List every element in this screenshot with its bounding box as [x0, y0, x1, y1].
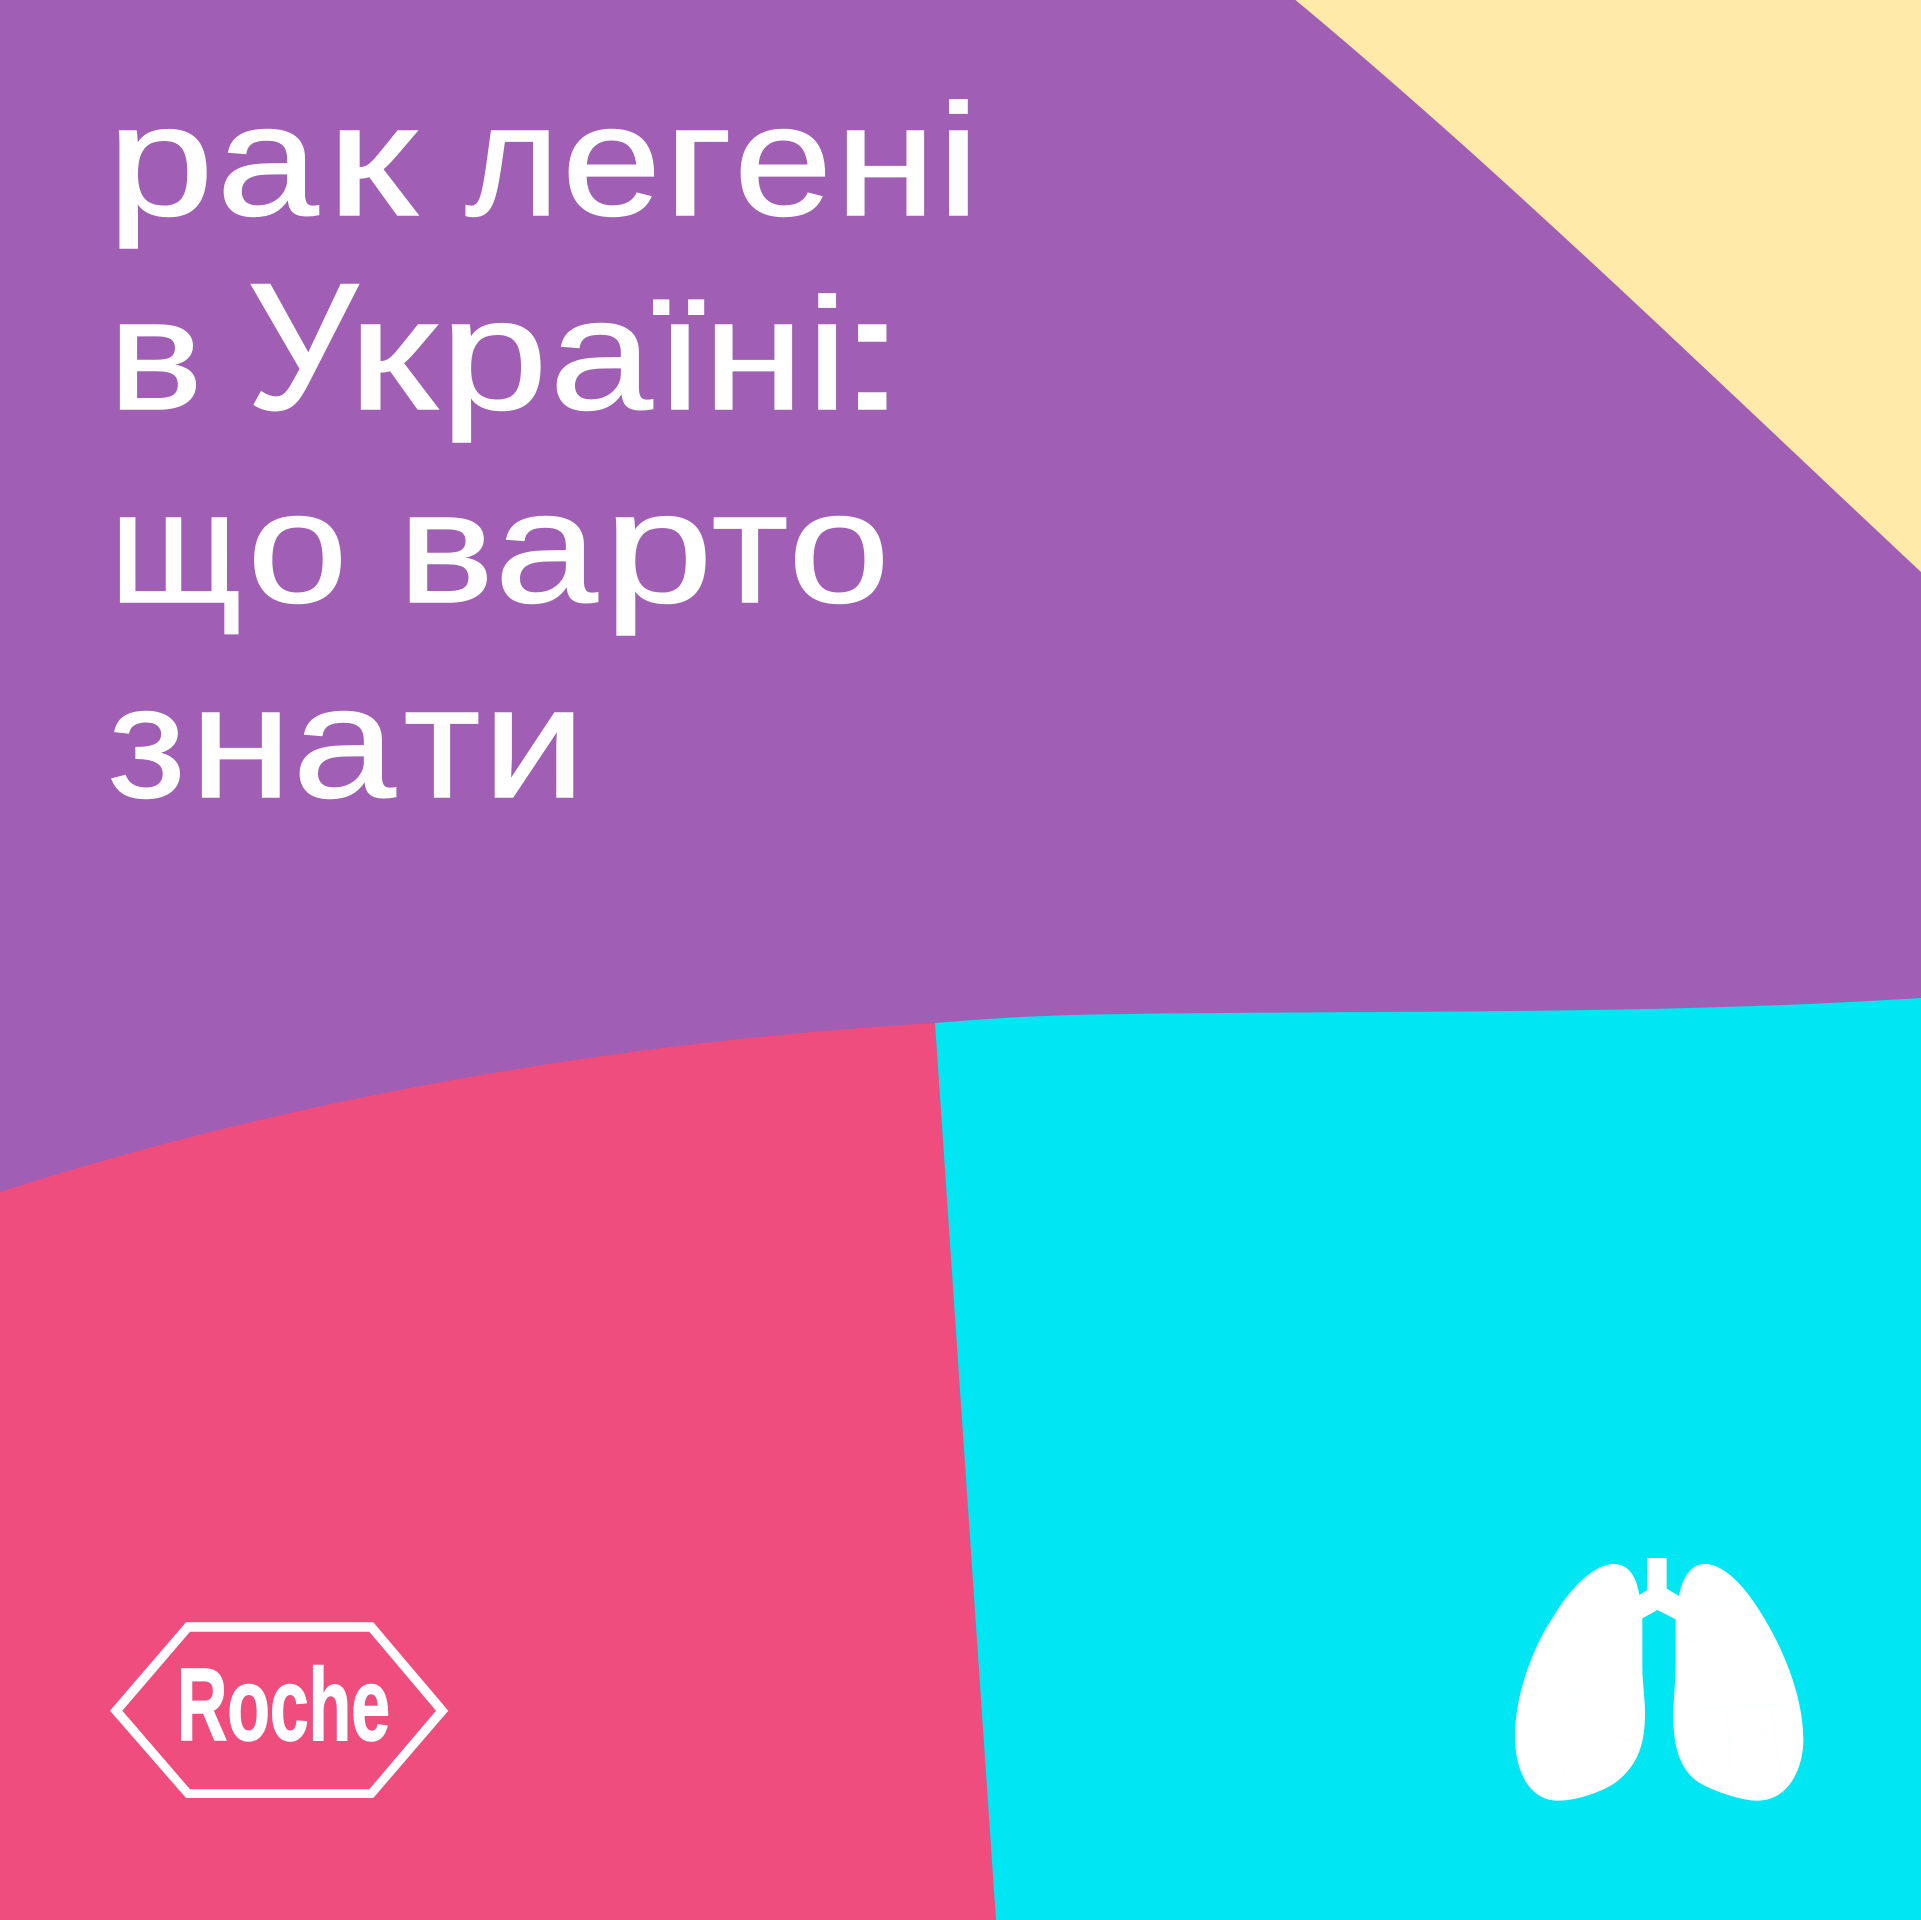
title: а [217, 71, 319, 249]
title: щ [110, 458, 242, 636]
title: е [562, 71, 661, 249]
title: о [788, 458, 890, 636]
title: т [404, 653, 480, 831]
title: к [348, 265, 439, 443]
title: в [398, 458, 494, 636]
title: н [190, 653, 292, 831]
title: н [703, 265, 804, 443]
title: о [247, 458, 348, 636]
title: г [664, 71, 733, 249]
title: р [604, 458, 713, 636]
title: и [483, 653, 585, 831]
title: р [107, 71, 214, 249]
title: а [293, 653, 396, 831]
logo: Roche hexagon: Roche [177, 1647, 390, 1762]
title: з [108, 653, 186, 831]
title: і [937, 71, 980, 249]
title: а [495, 458, 598, 636]
title: У [247, 246, 359, 448]
title: е [734, 71, 832, 249]
title: к [327, 71, 419, 249]
title: л [465, 71, 559, 249]
title [107, 71, 980, 831]
title: ї [653, 265, 705, 443]
title: н [835, 71, 936, 249]
title: а [550, 265, 653, 443]
panel: cyan lower-right [935, 998, 1921, 1920]
title: і [807, 265, 848, 443]
panel: pink lower-left [0, 1023, 996, 1920]
panel: cream top-right corner [1296, 0, 1921, 572]
title: в [108, 265, 203, 443]
title: р [440, 265, 548, 443]
title: т [712, 458, 788, 636]
icon: lungs [1515, 1558, 1803, 1801]
logo: Roche hexagon [110, 1622, 448, 1798]
title: : [834, 265, 910, 443]
